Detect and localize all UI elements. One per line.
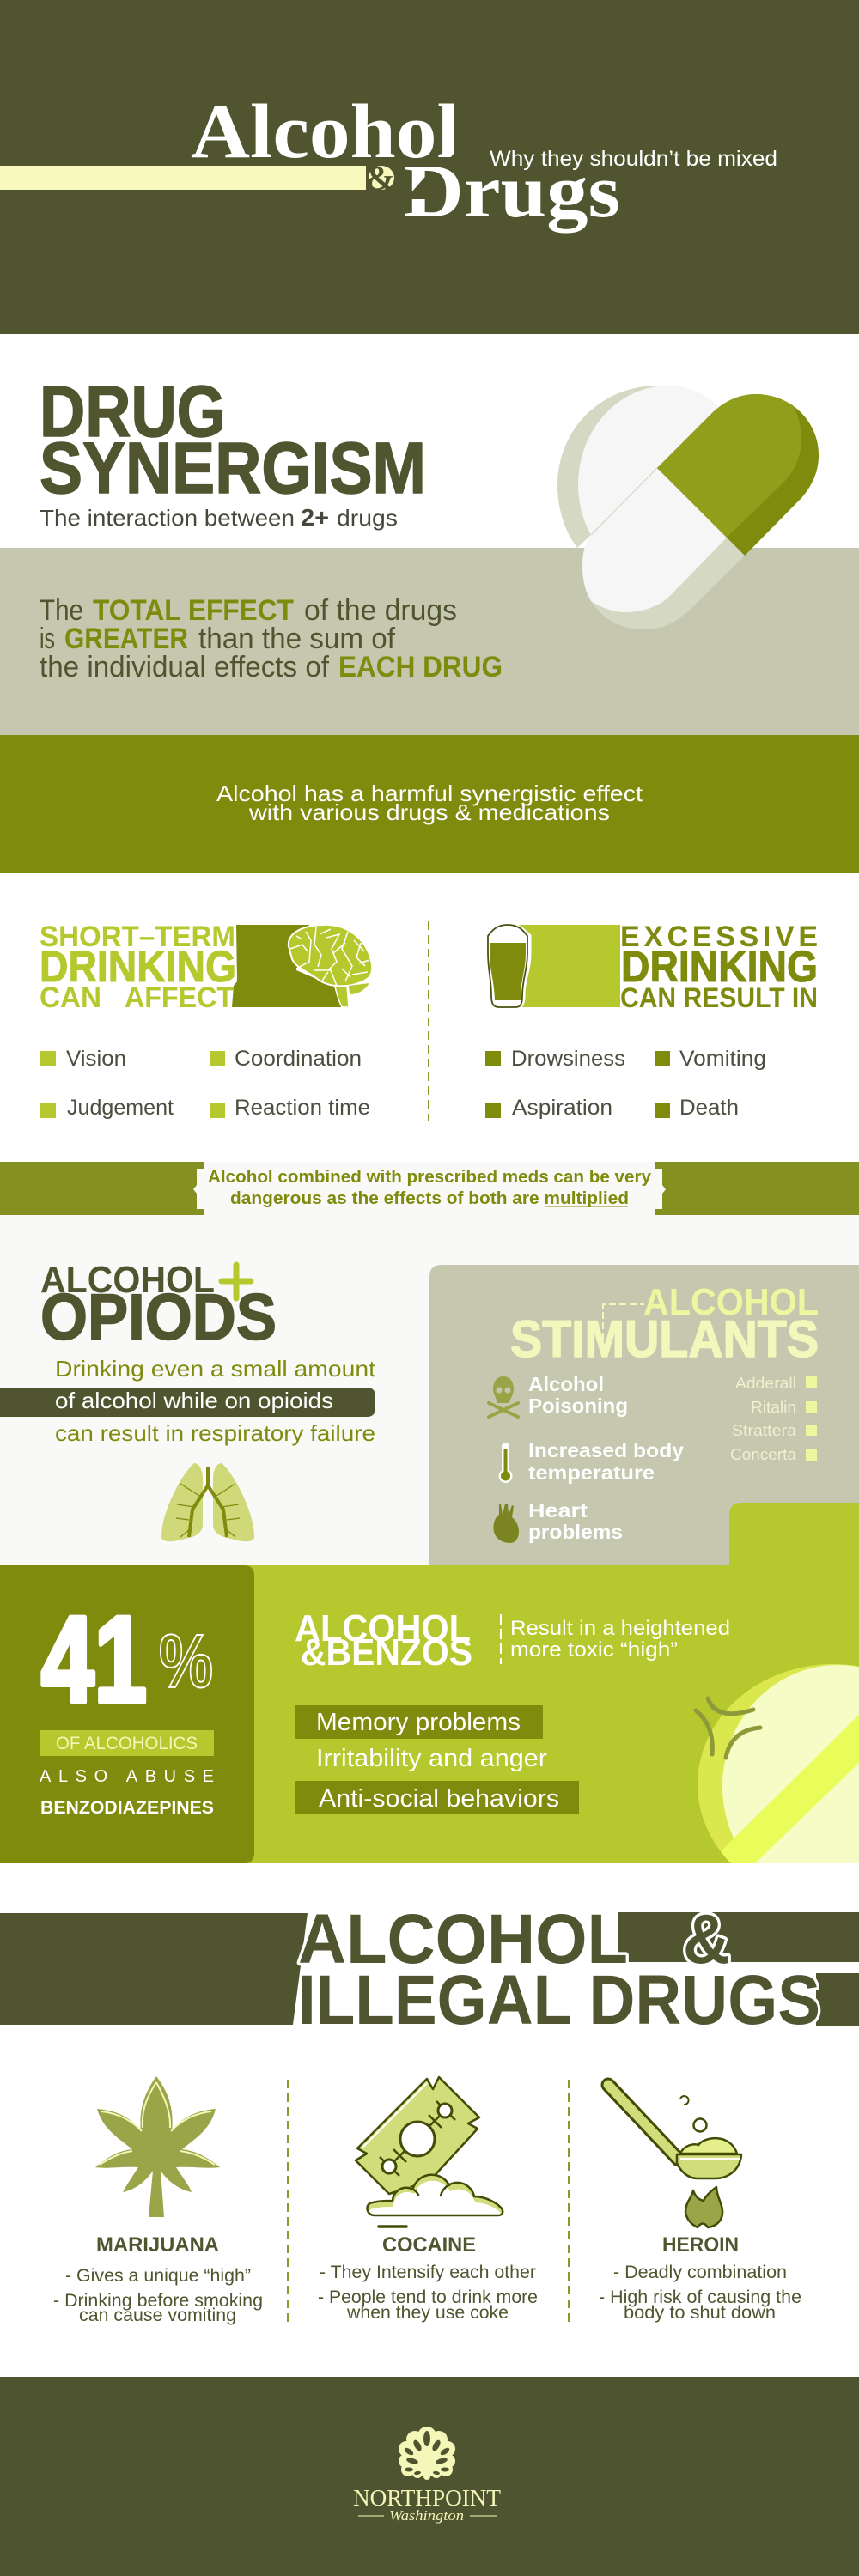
icon: large tablet [698, 1664, 859, 1863]
percent sign: % [159, 1619, 213, 1704]
heading: excessive drinking: CAN RESULT IN [620, 982, 818, 1013]
text: alcohol poisoning [528, 1373, 628, 1417]
text block: respiratory failure: of alcohol while on opioids [55, 1388, 333, 1413]
column: heroin text: HEROIN [662, 2233, 739, 2257]
text: heightened toxic high [510, 1617, 730, 1662]
heading: short-term drinking: SHORT–TERM [40, 920, 235, 953]
subheading: interaction between drugs: drugs [337, 505, 398, 531]
icon: thermometer [498, 1443, 512, 1483]
cream strip [0, 166, 366, 190]
banner: prescribed meds warning: Alcohol combined with prescribed meds can be very [208, 1168, 652, 1187]
heading: alcohol & benzos [295, 1607, 472, 1674]
text: heightened toxic high: more toxic “high” [510, 1638, 678, 1662]
list: stimulant names: Strattera [732, 1422, 797, 1439]
subheading: interaction between drugs: 2+ [301, 504, 329, 531]
icon: beer glass [486, 925, 529, 1007]
heading: alcohol stimulants: STIMULANTS [510, 1310, 819, 1368]
list: benzo effects: Memory problems [316, 1709, 521, 1736]
column: marijuana text: - Drinking before smoking [53, 2291, 263, 2311]
list: short-term effects: Coordination [235, 1047, 362, 1071]
icon: heroin spoon and flame [608, 2085, 741, 2227]
banner: illegal drugs bars [0, 1912, 859, 2026]
text block: total effect: than the sum of [198, 623, 396, 655]
column: marijuana text: - Gives a unique “high” [65, 2266, 251, 2286]
column: marijuana text: MARIJUANA [96, 2233, 219, 2257]
header panel [0, 0, 859, 334]
list: benzo effects: Irritability and anger [316, 1745, 547, 1772]
subheading: interaction between drugs: The interaction between [40, 505, 295, 531]
column: cocaine text [318, 2233, 538, 2323]
column: cocaine text: COCAINE [382, 2233, 476, 2257]
heading: excessive drinking: DRINKING [621, 942, 818, 991]
icon: brain banner [232, 925, 372, 1007]
icon: cocaine razor and powder [356, 2077, 503, 2227]
heading: alcohol & benzos: ALCOHOL [295, 1607, 471, 1649]
heading: Drug Synergism: SYNERGISM [40, 428, 426, 508]
text: heart problems: Heart [528, 1499, 588, 1522]
icon: heart [493, 1504, 519, 1543]
icon: skull and crossbones [489, 1376, 518, 1417]
text block: total effect: GREATER [64, 623, 188, 655]
list: excessive drinking results: Vomiting [679, 1047, 766, 1071]
text: increased body temperature: temperature [528, 1461, 655, 1484]
heading: short-term drinking: DRINKING [40, 942, 236, 991]
heading: excessive drinking: EXCESSIVE [620, 920, 818, 953]
column: marijuana text [53, 2233, 263, 2325]
list: stimulant names: Ritalin [751, 1399, 796, 1416]
icon: lungs [161, 1463, 254, 1541]
text block: total effect: of the drugs [304, 594, 457, 627]
banner: lime block [519, 925, 620, 1007]
list: excessive drinking results: Drowsiness [511, 1047, 625, 1071]
column: heroin text [599, 2233, 801, 2323]
heading: alcohol stimulants: ALCOHOL [643, 1281, 819, 1323]
column: heroin text: body to shut down [624, 2303, 776, 2323]
list: excessive drinking results: Aspiration [512, 1096, 612, 1120]
subheading: interaction between drugs [40, 504, 398, 531]
text block: total effect: EACH DRUG [338, 651, 503, 683]
text: benzodiazepines: BENZODIAZEPINES [40, 1798, 214, 1818]
list: benzo effects [295, 1705, 579, 1814]
list: stimulant names [730, 1375, 817, 1463]
text block: respiratory failure: can result in respiratory failure [55, 1420, 375, 1446]
title: Alcohol: Alcohol [191, 89, 460, 174]
divider: dashed column lines [288, 2080, 569, 2323]
text: increased body temperature [528, 1439, 684, 1484]
number: 41: 41 [41, 1592, 147, 1728]
panel: harmful synergistic effect: with various drugs & medications [248, 799, 610, 825]
text block: respiratory failure [0, 1356, 376, 1446]
column: heroin text: - High risk of causing the [599, 2287, 801, 2307]
icon: northpoint peacock logo [399, 2427, 455, 2480]
text block: total effect: The [40, 594, 83, 627]
label: of alcoholics: OF ALCOHOLICS [56, 1734, 198, 1753]
column: cocaine text: when they use coke [346, 2303, 509, 2323]
panel: benzos lime [244, 1503, 859, 1863]
heading: alcohol & benzos: &BENZOS [301, 1631, 472, 1674]
label: of alcoholics [40, 1730, 214, 1756]
text block: total effect [40, 594, 503, 683]
heading: short-term drinking: AFFECT [125, 981, 234, 1014]
list: short-term effects: Vision [66, 1047, 126, 1071]
heading: excessive drinking [620, 920, 818, 1013]
column: heroin text: - Deadly combination [613, 2263, 787, 2282]
list: excessive drinking results [485, 1047, 766, 1120]
text: heart problems [528, 1499, 623, 1543]
ampersand: & [365, 159, 395, 197]
list: stimulant names: Concerta [730, 1446, 797, 1463]
banner: prescribed meds warning [0, 1162, 859, 1215]
divider: dashed line [428, 921, 430, 1121]
list: short-term effects: Reaction time [235, 1096, 370, 1120]
logo rules [358, 2515, 497, 2517]
title: Drugs: Drugs [404, 150, 620, 234]
panel: alcohol + stimulants [430, 1265, 859, 1567]
list: excessive drinking results: Death [679, 1096, 739, 1120]
icon: capsule pill [557, 386, 819, 629]
list: short-term effects: Judgement [67, 1096, 174, 1120]
heading: alcohol & illegal drugs [298, 1900, 820, 2039]
banner: prescribed meds warning: dangerous as the effects of both are multiplied [230, 1189, 629, 1208]
panel: harmful synergistic effect [0, 735, 859, 873]
list: benzo effects: Anti-social behaviors [319, 1785, 559, 1813]
column: cocaine text: - People tend to drink more [318, 2287, 538, 2307]
column: marijuana text: can cause vomiting [79, 2306, 236, 2325]
text: heightened toxic high: Result in a heightened [510, 1617, 730, 1640]
panel: off-white opioid background [0, 1215, 859, 1567]
heading: alcohol & illegal drugs: ILLEGAL DRUGS [298, 1961, 820, 2039]
text block: total effect: is [40, 623, 55, 655]
heading: alcohol + opioids: ALCOHOL [40, 1259, 215, 1301]
subtitle: Why they shouldn’t be mixed [490, 147, 777, 171]
text block: respiratory failure: Drinking even a small amount [55, 1356, 376, 1382]
heading: alcohol + opioids: OPIODS [40, 1281, 277, 1354]
panel: 41 percent stat [0, 1565, 254, 1863]
list: stimulant names: Adderall [735, 1375, 796, 1392]
icon: angry marks [696, 1698, 760, 1758]
text: heart problems: problems [528, 1521, 623, 1543]
heading: short-term drinking [40, 920, 236, 1014]
text: alcohol poisoning: Poisoning [528, 1394, 628, 1417]
list: short-term effects [40, 1047, 370, 1120]
text: increased body temperature: Increased body [528, 1439, 684, 1461]
logo script: Washington [389, 2507, 464, 2524]
heading: alcohol & illegal drugs: ALCOHOL [298, 1900, 628, 1978]
text block: total effect: the individual effects of [40, 651, 330, 683]
text: also abuse: ALSO ABUSE [40, 1767, 214, 1786]
title knockouts [405, 144, 461, 199]
heading: alcohol & illegal drugs: & [683, 1900, 730, 1978]
panel: footer [0, 2377, 859, 2576]
divider: dashed benzos [500, 1614, 502, 1664]
heading: alcohol stimulants [510, 1281, 819, 1368]
panel: harmful synergistic effect: Alcohol has a harmful synergistic effect [216, 781, 643, 806]
logo wordmark: NORTHPOINT [353, 2485, 502, 2511]
icon: marijuana leaf [95, 2076, 220, 2217]
text: alcohol poisoning: Alcohol [528, 1373, 604, 1395]
column: cocaine text: - They Intensify each other [320, 2263, 536, 2282]
text block: total effect: TOTAL EFFECT [93, 594, 294, 627]
panel: definition background band [0, 548, 859, 735]
heading: Drug Synergism [40, 371, 426, 508]
heading: Drug Synergism: DRUG [40, 371, 226, 452]
heading: short-term drinking: CAN [40, 981, 101, 1014]
